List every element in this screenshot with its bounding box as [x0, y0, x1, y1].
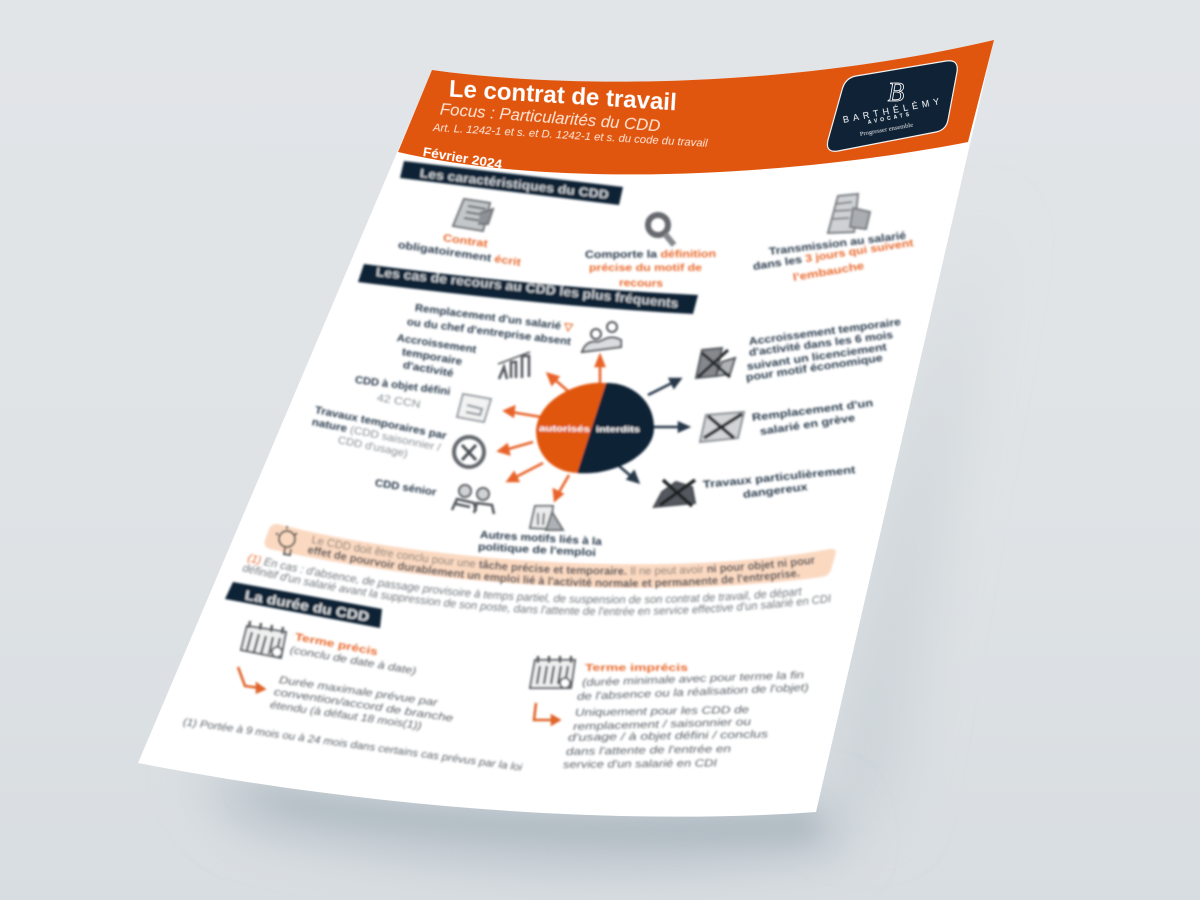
icon: crossed danger: [654, 480, 695, 507]
logo avocats: AVOCATS: [867, 112, 910, 126]
callout: [264, 523, 837, 590]
text: uniquement: dans l'attente de l'entrée en: [566, 743, 731, 758]
text: uniquement: remplacement / saisonnier ou: [573, 716, 751, 733]
text: terme imprécis: Terme imprécis: [585, 662, 688, 674]
text: interdits labels: pour motif économique: [745, 352, 884, 384]
text: autorisés labels: CDD sénior: [374, 477, 437, 499]
chart: autorisés / interdits circle: interdits: [596, 424, 640, 434]
date: Février 2024: [422, 145, 503, 172]
text: interdits labels: Remplacement d'un: [751, 397, 874, 424]
page shadow: [190, 200, 990, 868]
text: transmission au salarié: l'embauche: [792, 260, 865, 284]
legal reference: Art. L. 1242-1 et s. et D. 1242-1 et s. du code du travail: [432, 122, 708, 150]
text: autorisés labels: ou du chef d'entreprise absent: [406, 316, 572, 348]
icon: document 42: [457, 394, 491, 422]
heading: caractéristiques: [400, 161, 623, 205]
text: interdits labels: Travaux particulièrement: [702, 464, 856, 491]
text: uniquement: d'usage / à objet défini / conclus: [568, 728, 769, 744]
icon: contract: [453, 199, 493, 231]
icon: calendar left: [241, 621, 286, 658]
text: contrat écrit: Contrat: [442, 232, 489, 250]
panel: blurred poster content: [182, 160, 915, 774]
text: transmission au salarié: dans les 3 jours qui suivent: [752, 237, 915, 273]
text: autorisés labels: [311, 302, 602, 559]
icon: crossed document: [696, 348, 735, 378]
text: terme précis: [289, 631, 417, 677]
text: autorisés labels: nature (CDD saisonnier /: [311, 416, 442, 454]
chart: autorisés / interdits circle: [536, 383, 654, 473]
text: autorisés labels: 42 CCN: [376, 392, 421, 411]
icon: seasonal circle: [454, 437, 484, 467]
callout: effet de pourvoir durablement un emploi lié à l'activité normale et permanente de l'entreprise.: [306, 546, 800, 590]
text: terme imprécis: de l'absence ou la réalisation de l'objet): [577, 682, 809, 703]
arrows: interdits: [618, 379, 688, 482]
text: interdits labels: suivant un licenciement: [746, 341, 888, 373]
icon: lightbulb: [276, 526, 297, 555]
text: durée maximale: [269, 674, 454, 732]
callout text: Le CDD doit être conclu pour une tâche précise et temporaire. Il ne peut avoir ni pour objet ni pour: [311, 535, 816, 578]
text: autorisés labels: Remplacement d'un salarié ▽: [414, 302, 574, 334]
text: uniquement: [563, 704, 769, 771]
text: terme précis: (conclu de date à date): [289, 644, 417, 677]
heading: durée: La durée du CDD: [244, 588, 371, 625]
footnote: définitif d'un salarié avant la suppression de son poste, dans l'attente de l'entrée en service effective d'un salarié en CDI: [241, 564, 832, 616]
icon: growth chart: [498, 352, 530, 379]
arrow: left: [238, 667, 264, 692]
logo name: BARTHÉLÉMY: [842, 96, 940, 125]
text: autorisés labels: Travaux temporaires par: [314, 404, 448, 442]
icon: people: [582, 322, 621, 352]
text: durée maximale: convention/accord de branche: [273, 686, 454, 725]
footnote: (1) En cas : d'absence, de passage provisoire à temps partiel, de suspension de son contrat de travail, de départ: [246, 552, 802, 606]
icon: calendar right: [530, 656, 575, 688]
text: transmission au salarié: [752, 230, 915, 284]
text: définition du motif: Comporte la définition: [585, 248, 716, 261]
text: uniquement: Uniquement pour les CDD de: [575, 704, 749, 719]
text: définition du motif: [585, 248, 716, 290]
heading: durée: [225, 582, 382, 628]
icon: transmission document: [828, 194, 870, 233]
text: terme imprécis: [577, 662, 809, 703]
text: interdits labels: [702, 316, 902, 501]
title: Le contrat de travail: [448, 76, 677, 116]
subtitle: Focus : Particularités du CDD: [439, 100, 661, 135]
text: autorisés labels: Accroissement: [396, 332, 478, 356]
text: contrat écrit: obligatoirement écrit: [397, 239, 522, 269]
icon: employment policy document: [530, 506, 563, 530]
text: terme précis: Terme précis: [294, 631, 379, 658]
poster page: [138, 40, 994, 817]
chart: autorisés / interdits circle: autorisés: [539, 423, 590, 434]
note: (1) Portée à 9 mois ou à 24 mois dans certains cas prévus par la loi: [182, 716, 523, 774]
arrows: autorisés: [499, 356, 604, 500]
text: interdits labels: dangereux: [742, 481, 808, 501]
text: autorisés labels: CDD d'usage): [337, 434, 409, 460]
icon: crossed strike: [700, 412, 744, 442]
text: autorisés labels: politique de l'emploi: [478, 541, 596, 559]
text: autorisés labels: temporaire: [401, 346, 463, 368]
text: transmission au salarié: Transmission au salarié: [768, 230, 907, 258]
heading: caractéristiques: Les caractéristiques du CDD: [419, 166, 610, 202]
text: terme imprécis: (durée minimale avec pour terme la fin: [582, 669, 804, 689]
text: interdits labels: salarié en grève: [759, 412, 856, 438]
text: durée maximale: étendu (à défaut 18 mois(1)): [269, 699, 422, 732]
text: définition du motif: recours: [619, 277, 663, 290]
heading: cas de recours: [358, 264, 698, 314]
text: interdits labels: d'activité dans les 6 mois: [748, 329, 894, 359]
orange header band: [398, 40, 994, 174]
text: autorisés labels: Autres motifs liés à la: [480, 529, 602, 548]
text: interdits labels: Accroissement temporaire: [748, 316, 902, 348]
logo tagline: Progresser ensemble: [859, 123, 914, 138]
text: autorisés labels: d'activité: [402, 359, 454, 380]
icon: magnifier: [648, 215, 674, 245]
heading: cas de recours: Les cas de recours au CDD les plus fréquents: [375, 265, 679, 311]
logo: [827, 61, 957, 151]
text: définition du motif: précise du motif de: [589, 262, 702, 274]
logo monogram: B: [888, 77, 904, 107]
text: durée maximale: Durée maximale prévue par: [278, 674, 439, 709]
icon: seniors: [452, 485, 494, 514]
text: autorisés labels: CDD à objet défini: [354, 374, 451, 398]
arrow: right: [534, 703, 559, 724]
text: uniquement: service d'un salarié en CDI: [563, 757, 717, 771]
